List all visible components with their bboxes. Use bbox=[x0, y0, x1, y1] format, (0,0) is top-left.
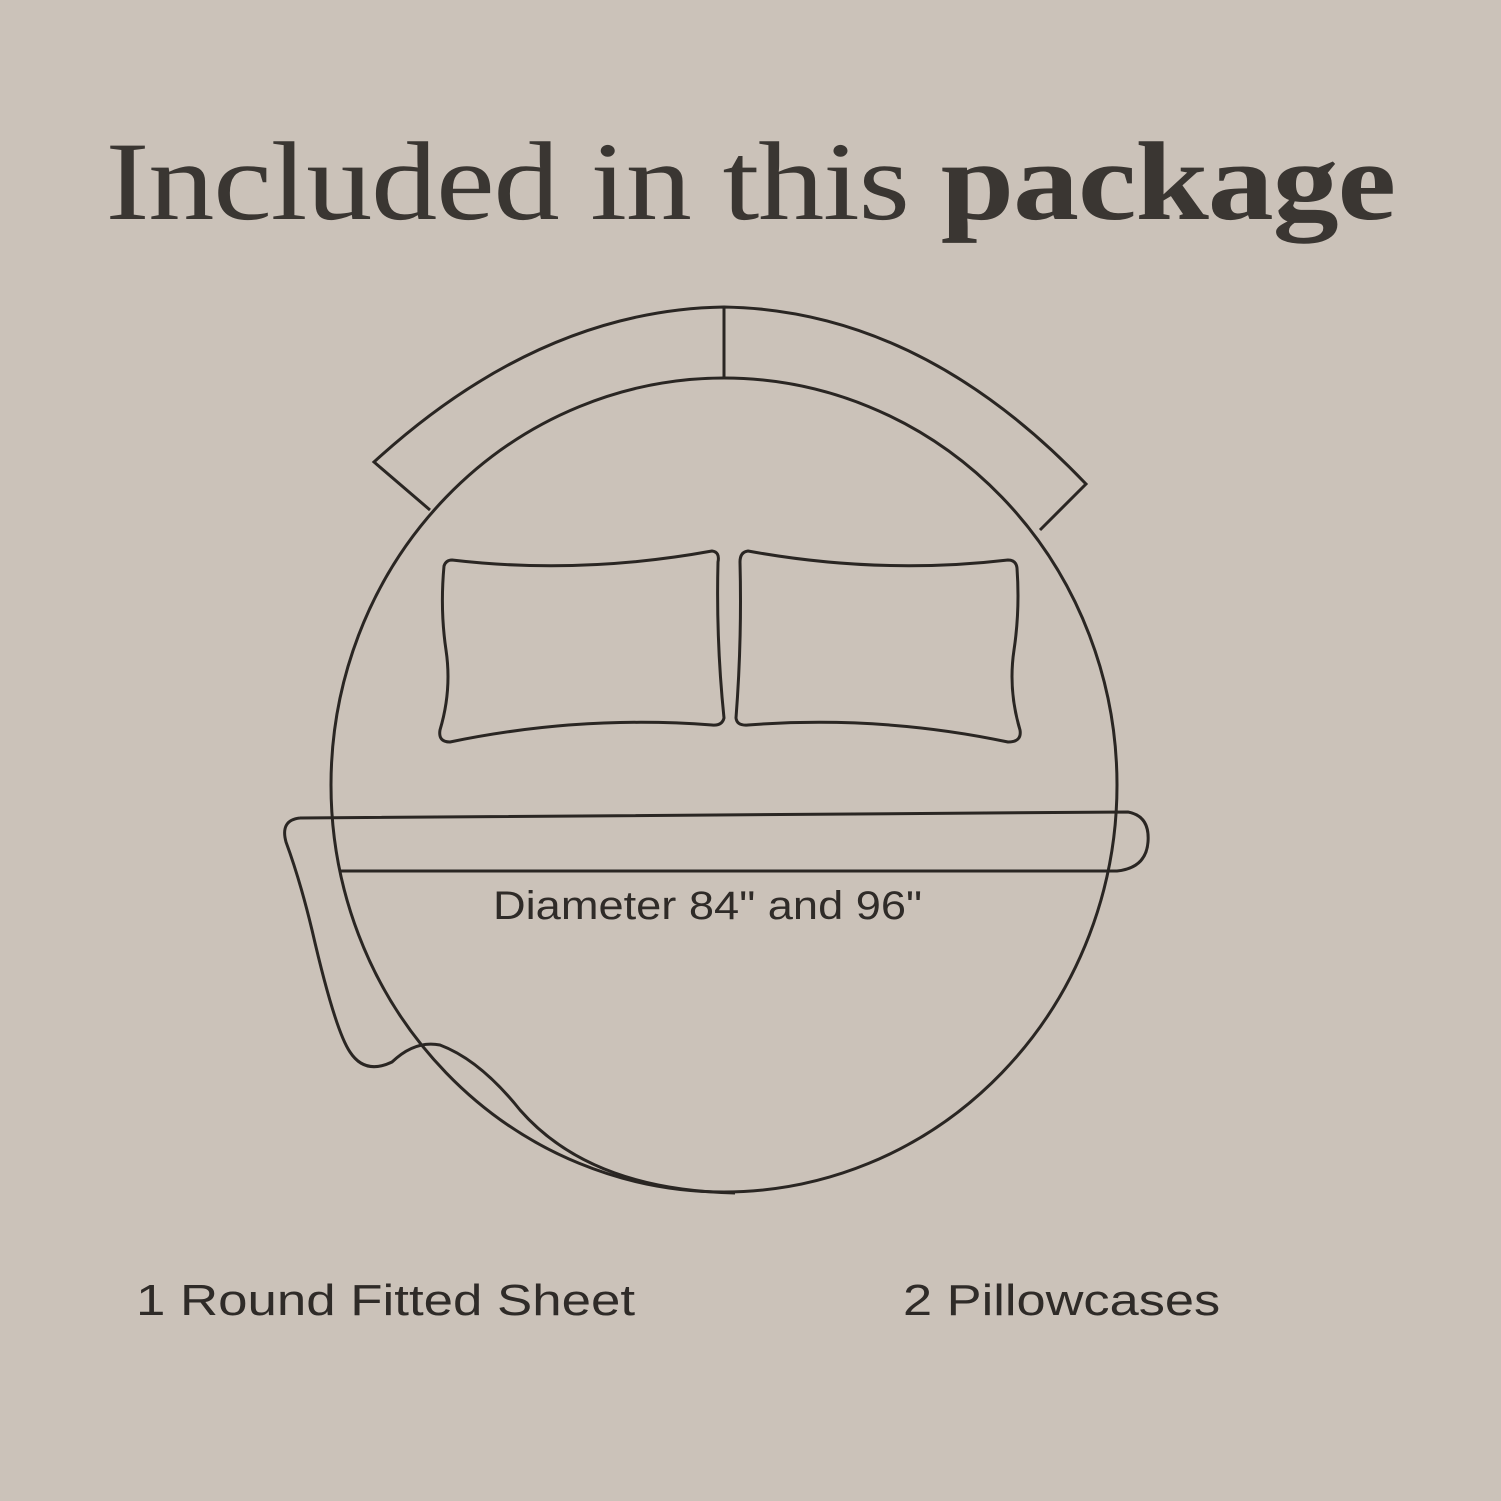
label: fitted sheet: 1 Round Fitted Sheet bbox=[136, 1276, 635, 1325]
round mattress bbox=[331, 378, 1117, 1192]
blanket / flat sheet bbox=[285, 812, 1148, 1193]
pillow left bbox=[440, 551, 724, 742]
title: Included in this package bbox=[105, 120, 1395, 244]
label: pillowcases: 2 Pillowcases bbox=[903, 1276, 1220, 1325]
headboard bbox=[374, 307, 1086, 530]
pillow right bbox=[736, 551, 1020, 742]
diameter label: Diameter 84" and 96" bbox=[493, 884, 922, 928]
